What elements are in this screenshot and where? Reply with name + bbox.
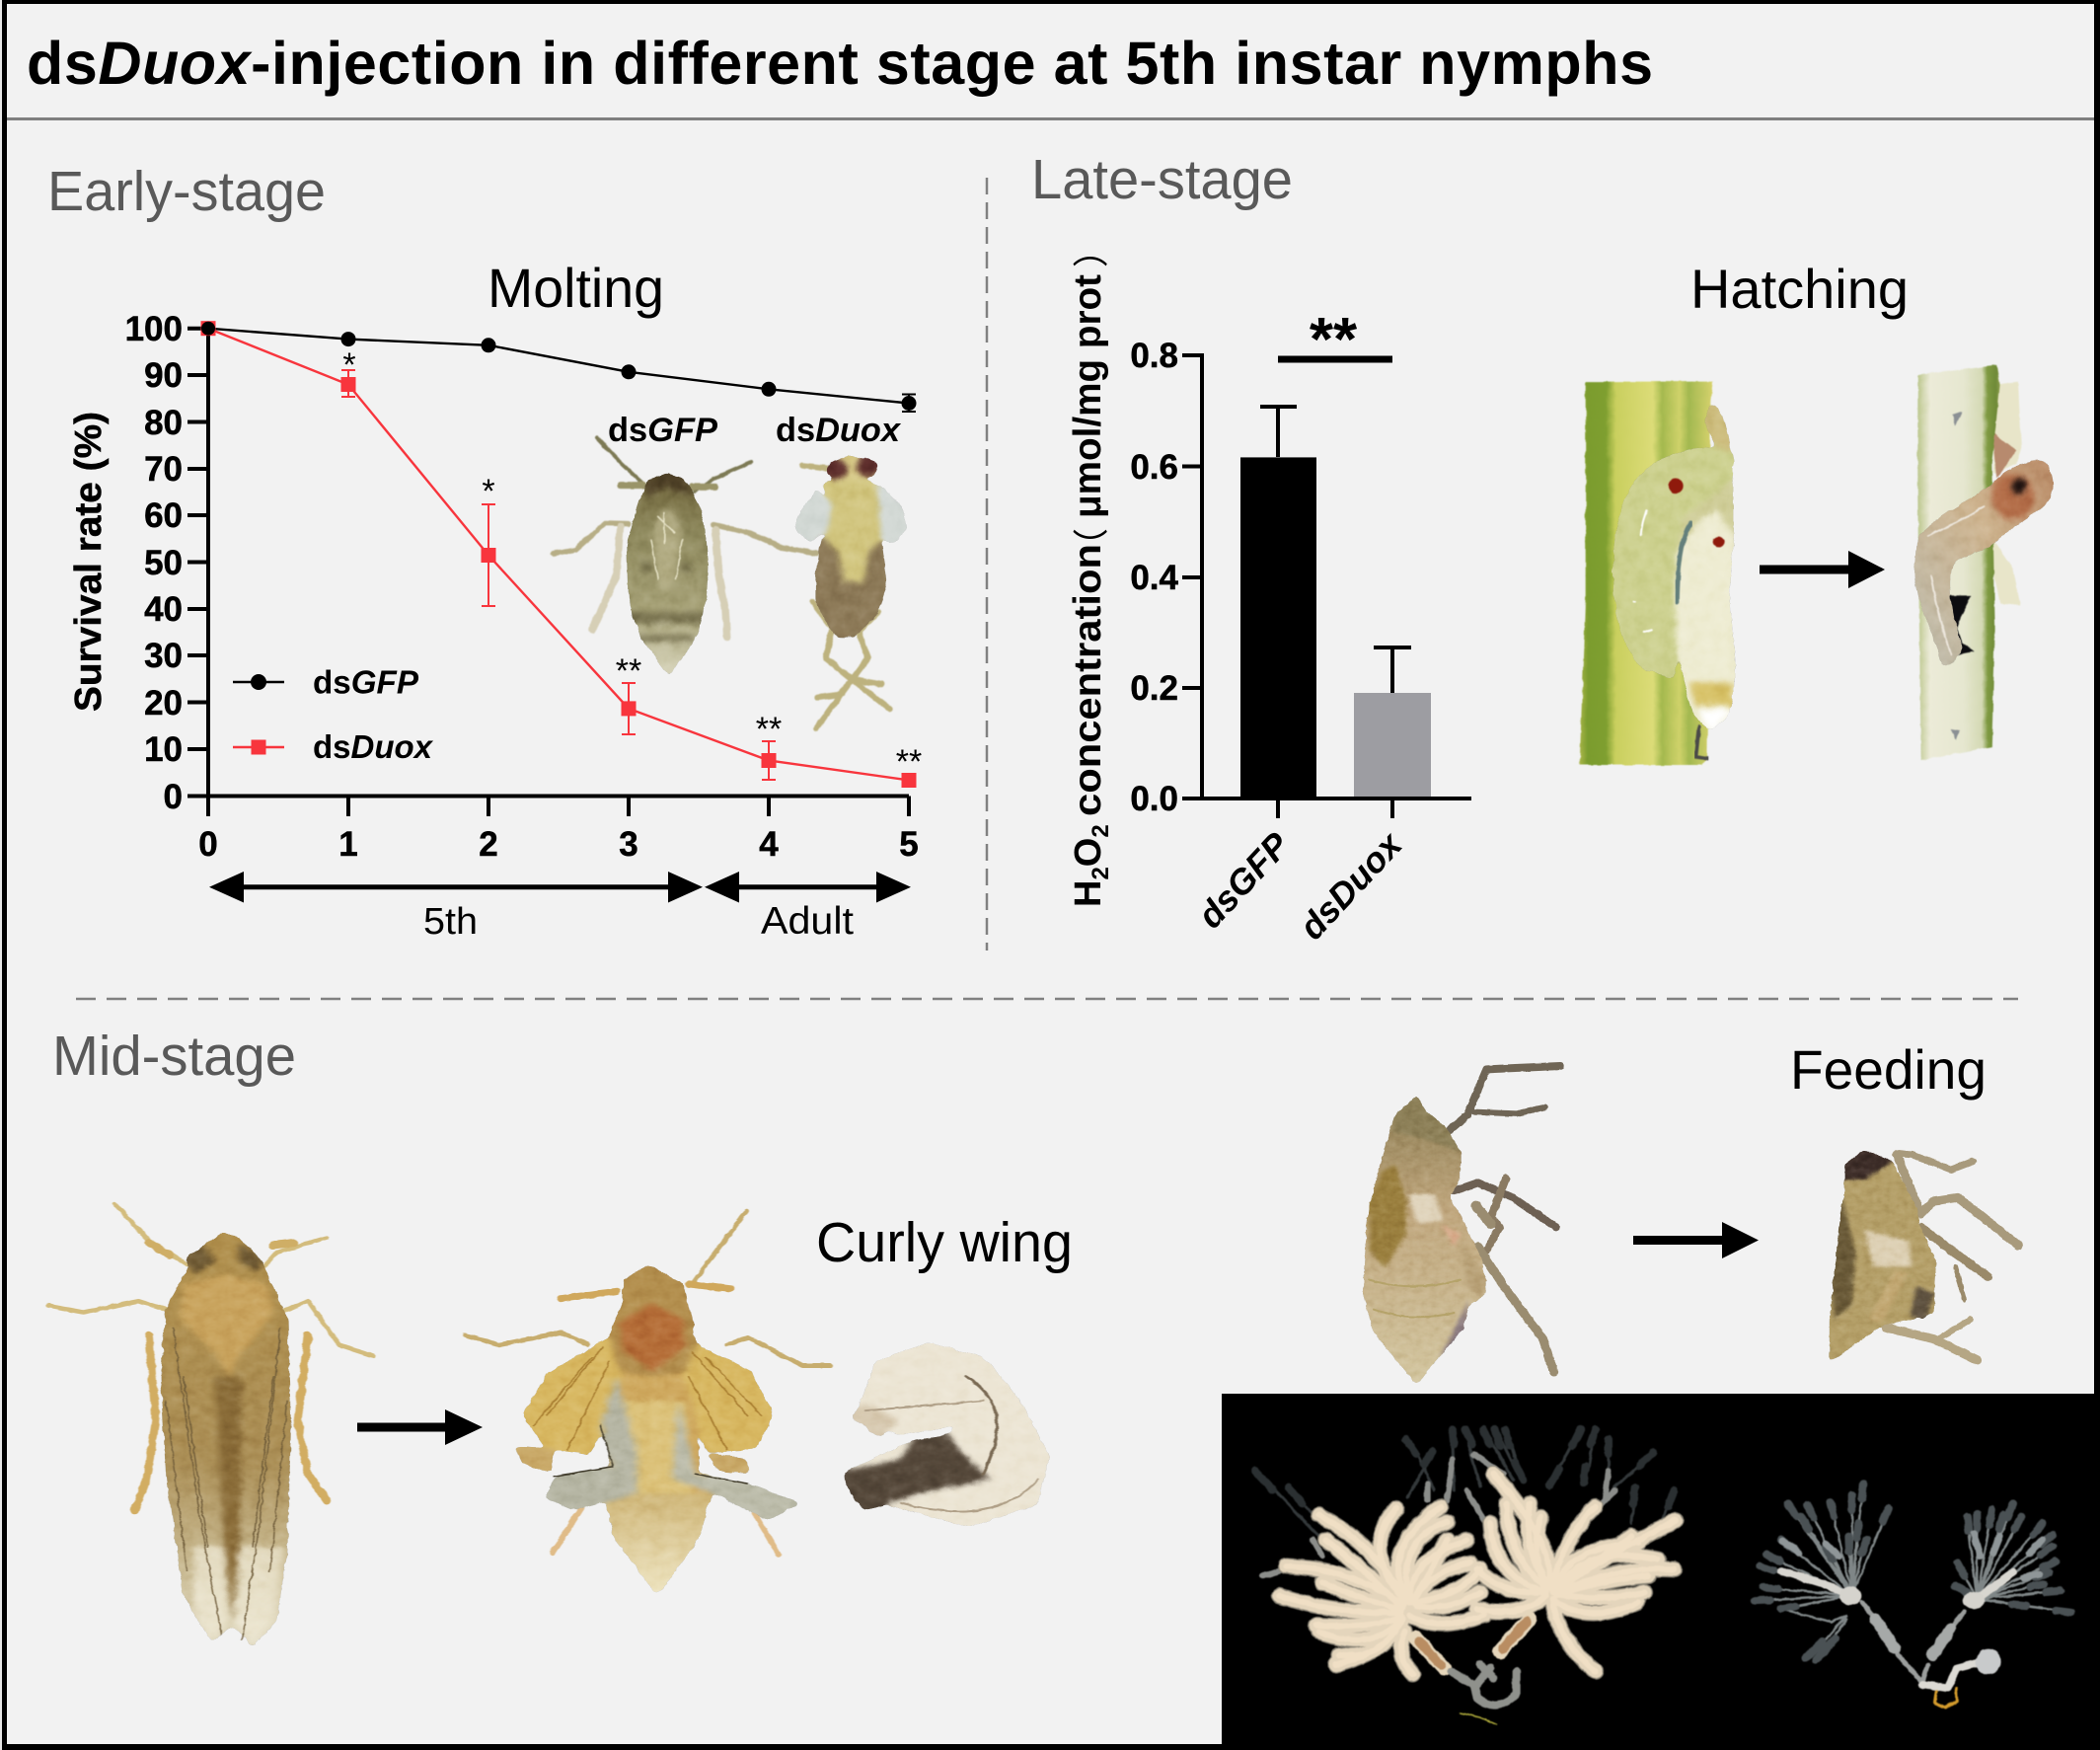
survival line chart: 80	[144, 404, 183, 442]
heading: Mid-stage: Mid-stage	[52, 1025, 296, 1088]
survival line chart: 1	[338, 825, 358, 864]
survival line chart: 2	[479, 825, 498, 864]
photo: short side-view insect	[1830, 1150, 2018, 1362]
legend: dsDuox	[313, 728, 434, 765]
bar chart: 0.2	[1130, 669, 1178, 708]
arrow: 5th instar span	[209, 872, 703, 943]
heading: Hatching: Hatching	[1690, 258, 1909, 320]
series: dsDuox	[201, 321, 916, 788]
y axis label: H2O2 concentration: 2	[1088, 867, 1114, 880]
photo: dsDuox nymph	[794, 455, 907, 728]
survival line chart: 40	[144, 590, 183, 629]
panel: ovary photos on black	[1222, 1394, 2100, 1750]
photo: failed hatch on stem	[1914, 365, 2053, 760]
photo: normal side-view insect	[1363, 1066, 1560, 1385]
arrow: 5th instar span: 5th	[423, 901, 478, 943]
arrow: adult span	[705, 872, 911, 943]
significance stars: **	[896, 743, 922, 781]
y axis label: H2O2 concentration: μmol/mg prot	[1067, 274, 1109, 518]
significance bar	[1278, 306, 1392, 374]
ovariole tips	[1755, 1484, 2070, 1660]
photo: curled wing	[845, 1342, 1049, 1528]
vertical dashed divider	[986, 178, 988, 951]
survival line chart: 10	[144, 730, 183, 769]
heading: Molting: Molting	[488, 257, 664, 319]
arrow: hatching	[1760, 551, 1885, 588]
significance bar: **	[1310, 306, 1358, 374]
arrow: adult span: Adult	[761, 900, 854, 943]
bar: dsGFP	[1240, 407, 1316, 799]
heading: Feeding: Feeding	[1790, 1038, 1987, 1101]
photo: curly wing adult	[465, 1211, 831, 1596]
inset label: dsDuox: dsDuox	[776, 412, 902, 449]
survival line chart: 3	[619, 825, 638, 864]
panel: late-stage hatching	[1031, 148, 2053, 948]
photo: normal adult	[48, 1204, 374, 1646]
series: dsGFP	[208, 329, 916, 412]
heading: Early-stage: Early-stage	[47, 160, 326, 223]
photo: egg on rice stem	[1580, 382, 1735, 765]
germarium stems	[1255, 1428, 1675, 1576]
arrow: feeding	[1633, 1222, 1759, 1258]
y axis label: H2O2 concentration	[1067, 232, 1114, 907]
y axis label: H2O2 concentration: H	[1068, 880, 1109, 907]
oviduct	[1862, 1602, 1964, 1681]
photo: normal ovaries	[1255, 1428, 1676, 1724]
y axis label: H2O2 concentration: O	[1068, 838, 1109, 867]
photo: dsGFP nymph	[554, 437, 817, 676]
y axis label: H2O2 concentration: concentration	[1067, 544, 1109, 816]
title: dsDuox-injection in different stage at 5th instar nymphs	[27, 30, 1653, 97]
heading: Late-stage: Late-stage	[1031, 148, 1293, 211]
y axis label: H2O2 concentration: ）	[1071, 232, 1111, 267]
heading: Curly wing: Curly wing	[816, 1211, 1073, 1274]
panel: mid-stage curly wing	[48, 1025, 1073, 1646]
significance stars: **	[756, 711, 782, 748]
legend	[233, 663, 434, 765]
panel: early-stage molting	[47, 160, 922, 943]
white core	[1781, 1571, 2013, 1599]
bar chart: 0.4	[1130, 559, 1179, 597]
ovariole stalks	[1769, 1498, 2056, 1655]
horizontal dashed divider	[76, 998, 2018, 1000]
y axis label: Survival rate (%)	[68, 412, 110, 712]
bar: dsDuox	[1354, 647, 1431, 799]
significance stars: **	[616, 652, 641, 690]
survival line chart: 4	[759, 825, 779, 864]
significance stars: *	[342, 346, 356, 384]
bar chart: 0.0	[1130, 780, 1178, 818]
significance stars	[342, 346, 922, 781]
bar chart: dsDuox	[1291, 823, 1411, 948]
y axis label: H2O2 concentration: （	[1071, 528, 1111, 564]
panel: mid-stage feeding	[1363, 1038, 2018, 1385]
photo: Duox ovaries	[1755, 1484, 2070, 1708]
significance stars: *	[482, 473, 495, 510]
survival line chart: 0	[164, 778, 183, 816]
survival line chart: 60	[144, 496, 183, 535]
legend: dsGFP	[313, 663, 419, 701]
survival line chart: 20	[144, 684, 183, 723]
arrow: curly wing	[357, 1409, 483, 1445]
bar chart: 0.8	[1130, 337, 1178, 375]
survival line chart: 0	[198, 825, 218, 864]
bar chart	[1130, 306, 1471, 948]
survival line chart: 100	[125, 310, 183, 348]
survival line chart: 90	[144, 356, 183, 395]
bar chart: 0.6	[1130, 448, 1178, 487]
x labels: dsGFP	[1189, 824, 1298, 936]
survival line chart: 5	[899, 825, 919, 864]
survival line chart: 50	[144, 544, 183, 582]
survival line chart: 70	[144, 450, 183, 489]
survival line chart: 30	[144, 637, 183, 675]
inset label: dsGFP: dsGFP	[608, 412, 717, 449]
survival line chart	[125, 310, 922, 864]
y axis label: H2O2 concentration: 2	[1088, 824, 1114, 838]
